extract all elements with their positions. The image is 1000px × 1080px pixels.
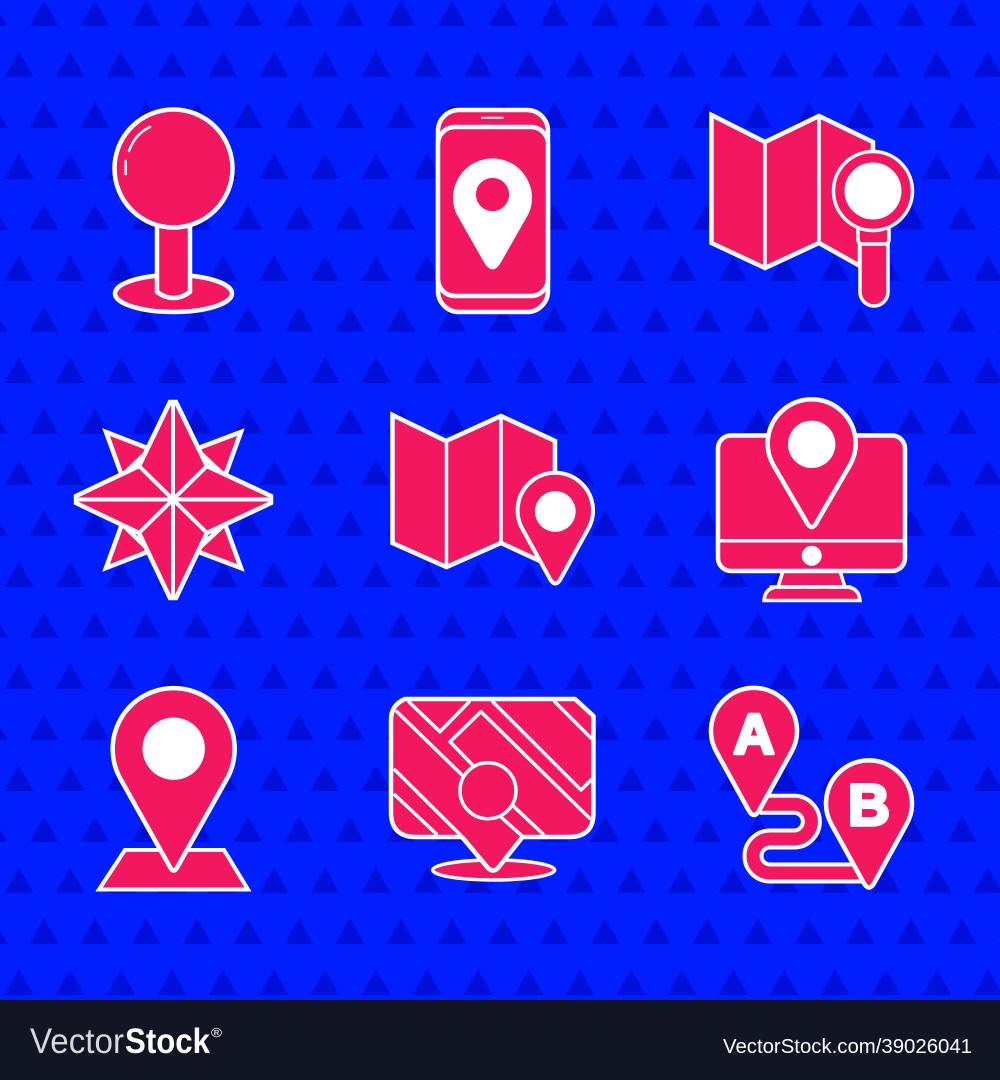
icon: route from A to B: A xyxy=(733,702,775,766)
image id: VectorStock.com/39026041 xyxy=(723,1036,972,1058)
icon: city map with pin xyxy=(391,699,594,880)
logo: VectorStock: Stock xyxy=(125,1022,210,1061)
icon: desktop monitor with location pin xyxy=(718,399,905,600)
logo: VectorStock: Vector xyxy=(30,1022,124,1061)
icon: smartphone with location pin xyxy=(438,110,548,312)
icon: location pin on map base xyxy=(99,688,248,890)
icon: route from A to B: B xyxy=(848,773,890,838)
logo: VectorStock: ® xyxy=(211,1025,222,1040)
logo: VectorStock xyxy=(30,1022,222,1061)
footer bar xyxy=(0,1000,1000,1080)
icon: compass rose xyxy=(76,402,271,598)
icon: route from A to B xyxy=(711,688,912,888)
icon: folded map with location pin xyxy=(392,415,593,584)
icon: folded map with magnifying glass xyxy=(712,115,912,306)
icon: push pin xyxy=(114,110,232,312)
